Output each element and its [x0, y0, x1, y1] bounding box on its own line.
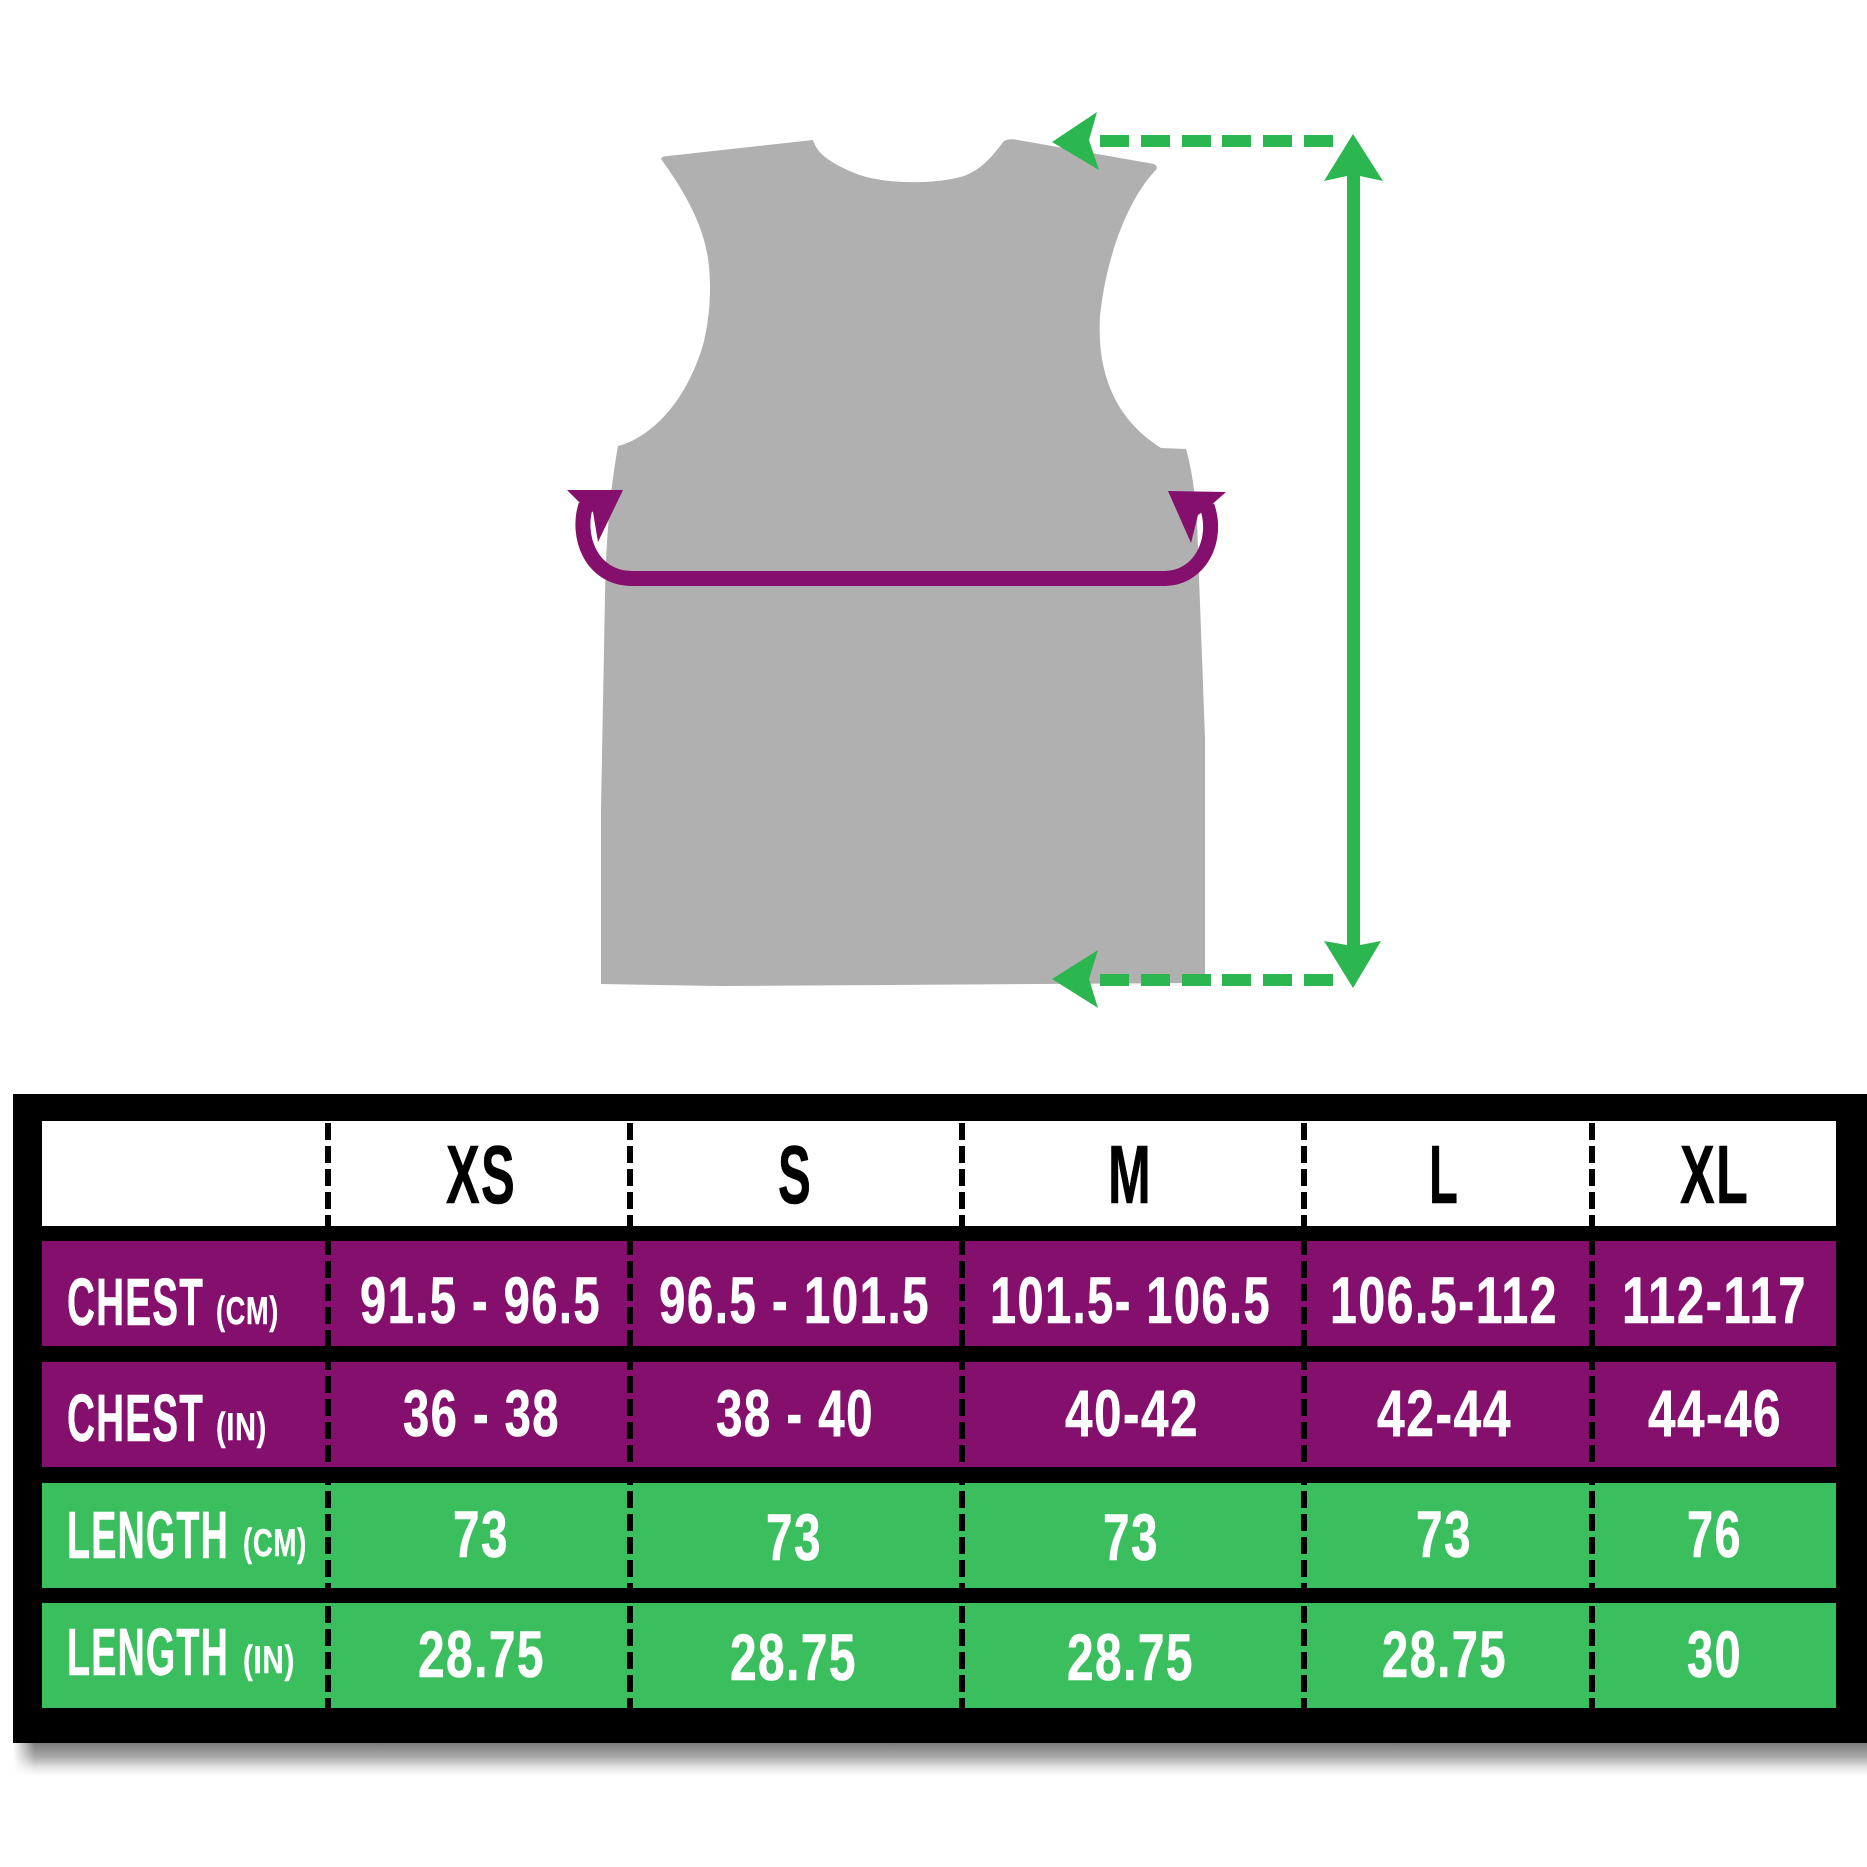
chest cm row: 112-117	[1622, 1263, 1807, 1337]
chest in row: (IN)	[216, 1406, 267, 1449]
chest in row: CHEST	[67, 1381, 204, 1456]
length in row: 30	[1687, 1617, 1742, 1691]
table frame	[13, 1094, 1867, 1743]
chest measurement arrow	[567, 490, 1226, 578]
length in row: 28.75	[418, 1617, 545, 1691]
chest cm row: CHEST	[67, 1265, 204, 1340]
length cm row: 73	[766, 1500, 822, 1574]
header sizes: M	[1108, 1128, 1152, 1221]
chest cm row: 91.5 - 96.5	[360, 1263, 601, 1337]
length in row: LENGTH	[67, 1615, 229, 1690]
chest cm row: 96.5 - 101.5	[659, 1263, 930, 1337]
top guide arrow	[1052, 112, 1333, 170]
header sizes	[446, 1128, 1749, 1221]
chest in row	[67, 1376, 1782, 1456]
chest in row: 40-42	[1065, 1376, 1199, 1450]
header sizes: S	[778, 1128, 812, 1221]
vertical double arrow	[1324, 134, 1383, 988]
length in row: 28.75	[1382, 1617, 1507, 1691]
table shadow	[13, 1743, 1867, 1776]
length in row: 28.75	[730, 1620, 857, 1694]
length in row	[67, 1615, 1742, 1694]
chest in row: 42-44	[1377, 1376, 1512, 1450]
chest cm row background	[42, 1241, 1836, 1346]
column dividers	[328, 1123, 1592, 1708]
header sizes: XS	[446, 1128, 516, 1221]
chest in row: 38 - 40	[716, 1376, 874, 1450]
chest cm row	[67, 1263, 1807, 1340]
size table	[13, 1094, 1867, 1776]
chest in row: 44-46	[1648, 1376, 1782, 1450]
length measurement arrow	[1052, 112, 1383, 1008]
chest cm row: 101.5- 106.5	[990, 1263, 1271, 1337]
header sizes: XL	[1680, 1128, 1749, 1221]
header sizes: L	[1429, 1128, 1459, 1221]
header row background	[42, 1121, 1836, 1226]
length in row background	[42, 1603, 1836, 1708]
length cm row: 76	[1687, 1497, 1742, 1571]
chest cm row: 106.5-112	[1330, 1263, 1558, 1337]
chest cm row: (CM)	[216, 1290, 279, 1333]
length cm row: 73	[453, 1497, 509, 1571]
length cm row background	[42, 1483, 1836, 1588]
length cm row: 73	[1416, 1497, 1472, 1571]
bottom guide arrow	[1052, 950, 1333, 1008]
length in row: (IN)	[243, 1639, 295, 1682]
vest silhouette	[601, 139, 1205, 986]
length cm row	[67, 1497, 1742, 1574]
length cm row: 73	[1103, 1500, 1159, 1574]
chest in row: 36 - 38	[403, 1376, 560, 1450]
chest in row background	[42, 1362, 1836, 1467]
length in row: 28.75	[1067, 1620, 1194, 1694]
length cm row: LENGTH	[67, 1498, 229, 1573]
length cm row: (CM)	[243, 1522, 307, 1565]
